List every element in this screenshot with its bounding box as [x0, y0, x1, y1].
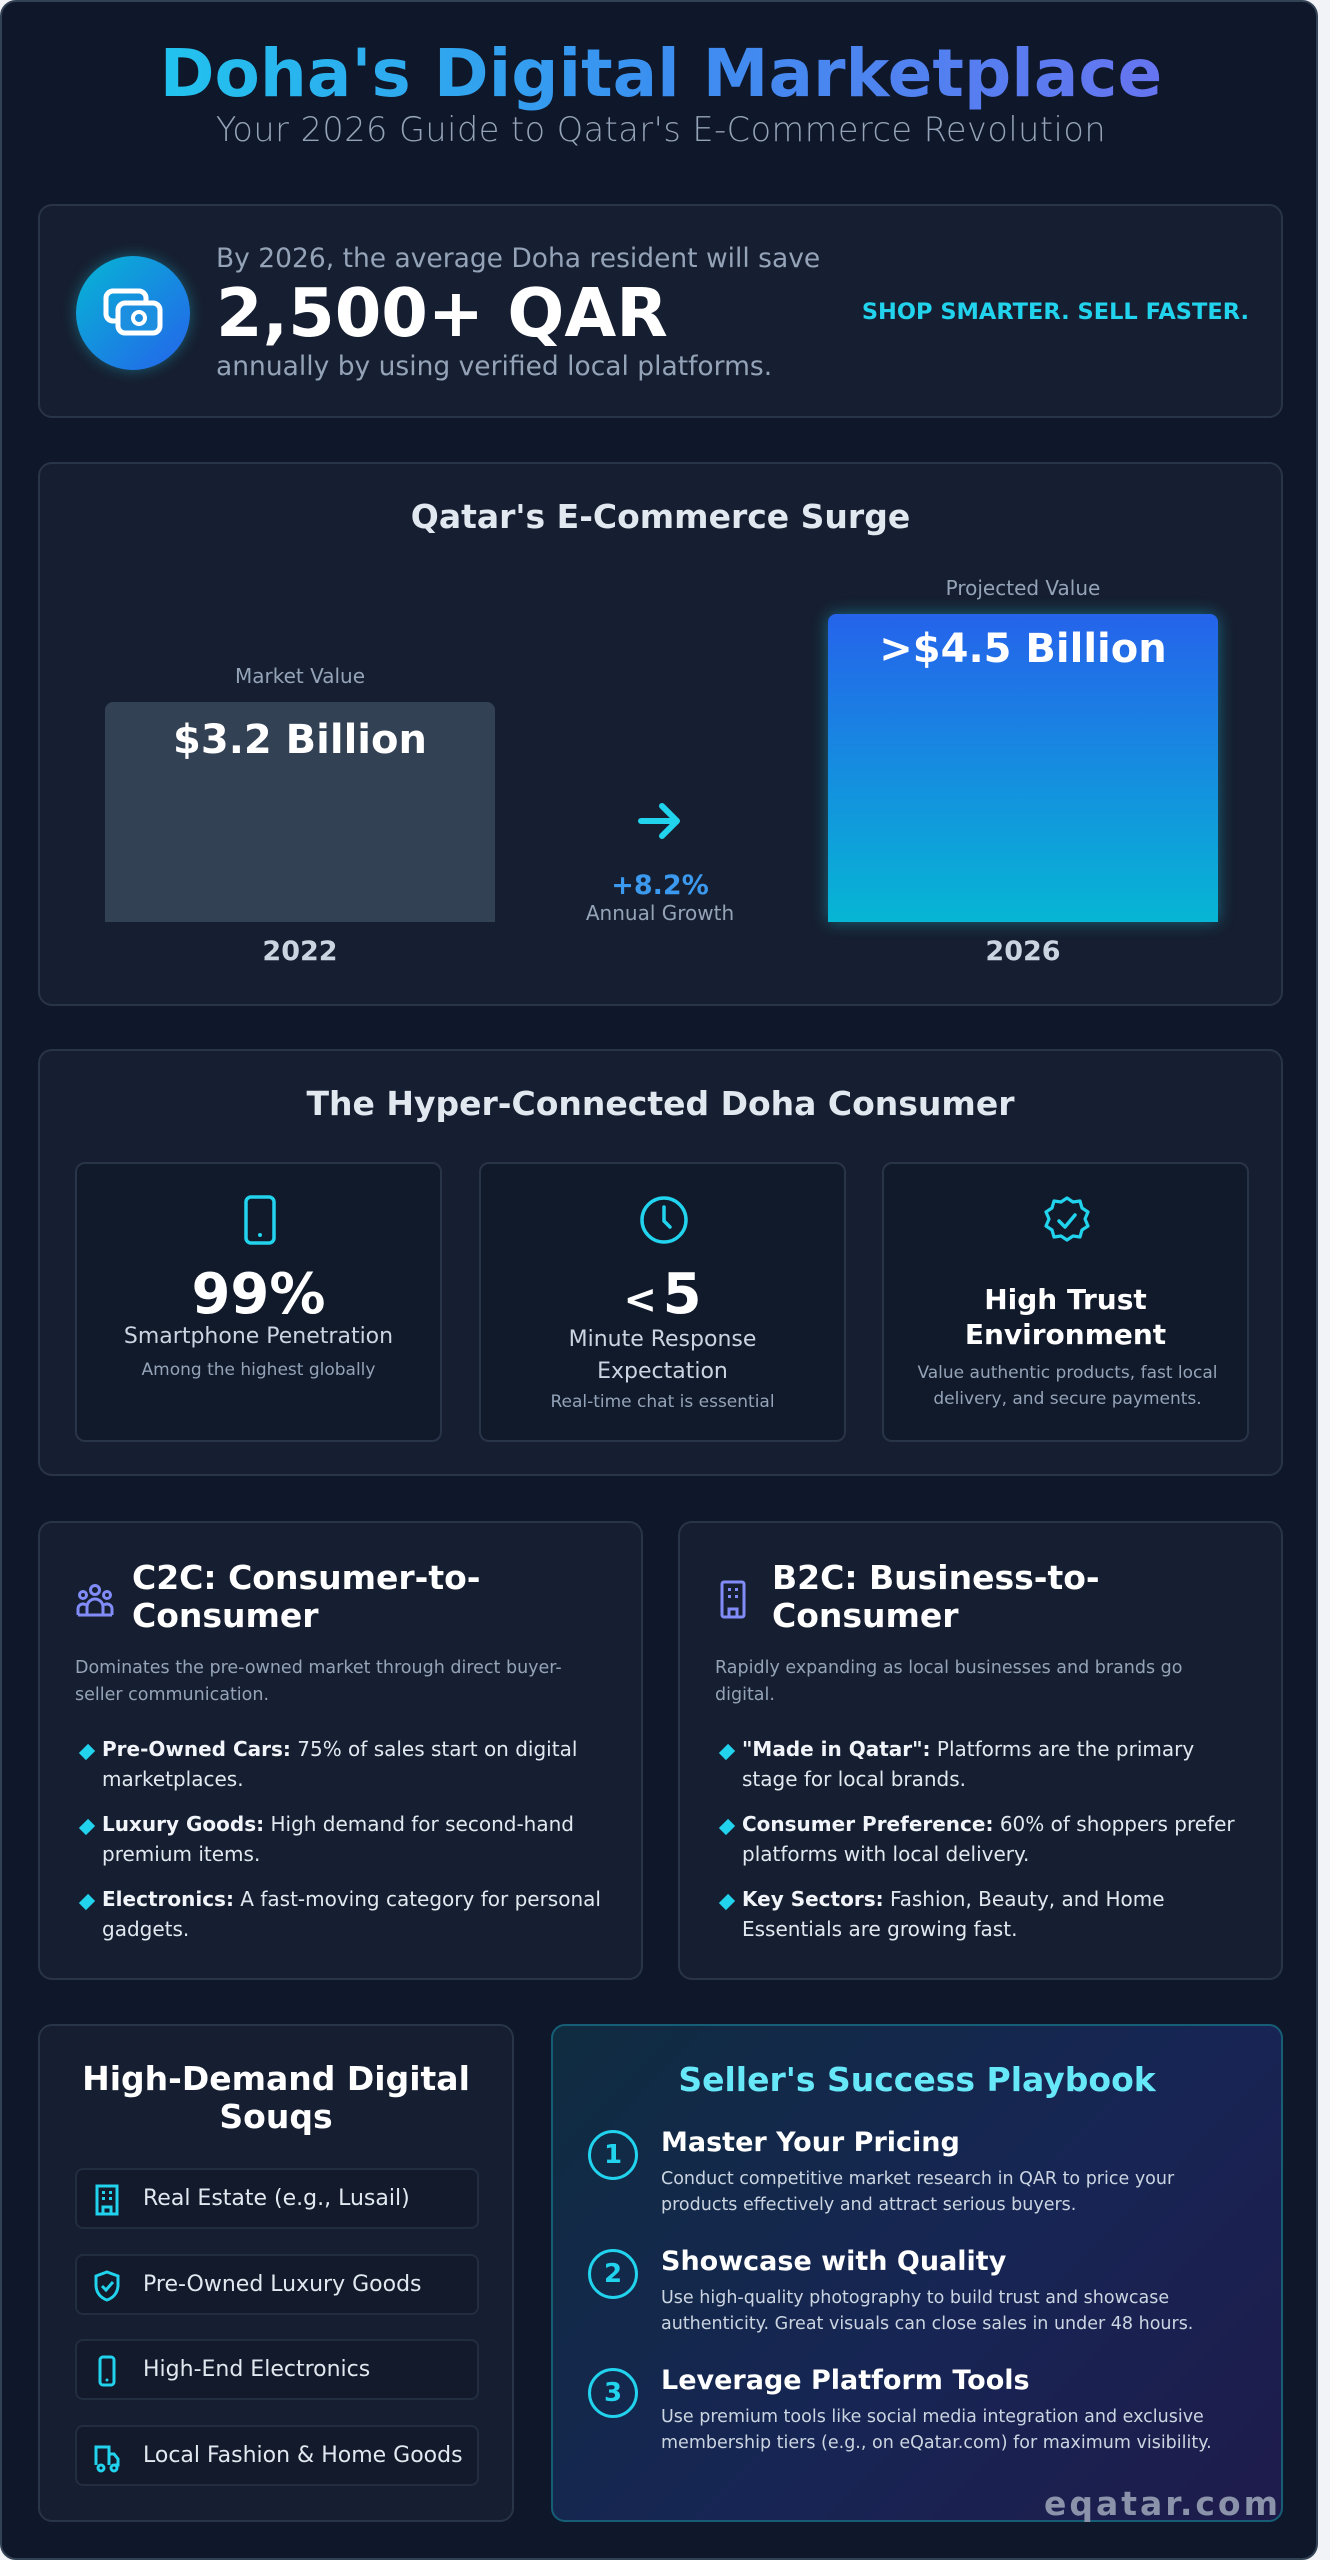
- item: fashion: [75, 2425, 479, 2486]
- step 3: [588, 2365, 1212, 2453]
- card: trust: Value authentic products, fast local delivery, and secure payments.: [917, 1363, 1218, 1409]
- panel: C2C: [38, 1521, 643, 1980]
- card: response time: Real-time chat is essential: [550, 1392, 775, 1412]
- heading: Souqs: [219, 2097, 333, 2136]
- bar 2026: [819, 576, 1227, 967]
- item: electronics: [75, 2339, 479, 2400]
- heading: Qatar's E-Commerce Surge: [411, 497, 910, 536]
- item: real estate: [75, 2168, 479, 2229]
- panel: e-commerce surge chart: 2022: [262, 936, 338, 967]
- bullets: Pre-Owned Cars: 75% of sales start on digital marketplaces.: [102, 1737, 577, 1791]
- heading: B2C: Business-to-: [772, 1558, 1100, 1597]
- subtitle: Your 2026 Guide to Qatar's E-Commerce Revolution: [216, 110, 1106, 149]
- description: Rapidly expanding as local businesses and brands go digital.: [715, 1658, 1183, 1705]
- item: fashion: Local Fashion & Home Goods: [143, 2443, 463, 2468]
- panel: hyper-connected consumer: [38, 1049, 1283, 1476]
- watermark: eqatar.com: [1044, 2484, 1281, 2523]
- bar 2022: [105, 664, 495, 967]
- heading: Consumer: [772, 1596, 959, 1635]
- heading: The Hyper-Connected Doha Consumer: [307, 1084, 1014, 1123]
- panel: C2C: Electronics: A fast-moving category for personal gadgets.: [102, 1887, 601, 1941]
- panel: B2C: Consumer Preference: 60% of shoppers prefer platforms with local delivery.: [742, 1812, 1235, 1866]
- item: electronics: High-End Electronics: [143, 2357, 370, 2382]
- panel: digital souqs: [38, 2024, 514, 2522]
- card: response time: < 5: [623, 1262, 702, 1327]
- title: Doha's Digital Marketplace: [160, 35, 1162, 112]
- icon: users: [76, 1584, 114, 1616]
- step 3: Leverage Platform Tools: [661, 2365, 1030, 2396]
- bar 2026: >$4.5 Billion: [879, 626, 1167, 672]
- icon: money: [76, 256, 190, 370]
- item: luxury goods: Pre-Owned Luxury Goods: [143, 2272, 422, 2297]
- step 1: [588, 2127, 1174, 2215]
- card: response time: [479, 1162, 846, 1442]
- card: response time: Expectation: [597, 1359, 728, 1384]
- panel: seller playbook: [551, 2024, 1283, 2522]
- bar 2022: Market Value: [235, 664, 365, 688]
- bullets: "Made in Qatar": Platforms are the primary stage for local brands.: [742, 1737, 1194, 1791]
- icon: building: [720, 1580, 746, 1618]
- panel: B2C: [678, 1521, 1283, 1980]
- item: luxury goods: [75, 2254, 479, 2315]
- card: trust: Environment: [965, 1318, 1166, 1351]
- icon: phone: [244, 1195, 276, 1245]
- step 3: Use premium tools like social media integration and exclusive membership tiers (e.g., on eQatar.com) for maximum visibility.: [661, 2407, 1212, 2453]
- growth arrow: [586, 803, 734, 925]
- item: real estate: Real Estate (e.g., Lusail): [143, 2186, 410, 2211]
- bar 2026: 2026: [985, 936, 1061, 967]
- card: response time: Minute Response: [569, 1327, 756, 1352]
- card: smartphone: Smartphone Penetration: [124, 1324, 393, 1349]
- step 3: 3: [604, 2378, 622, 2408]
- heading: Seller's Success Playbook: [678, 2060, 1156, 2099]
- savings text: [216, 243, 820, 382]
- savings text: 2,500+ QAR: [216, 274, 668, 352]
- icon: verified badge: [1044, 1196, 1090, 1242]
- step 1: Conduct competitive market research in QAR to price your products effectively and attract serious buyers.: [661, 2169, 1174, 2215]
- bar 2022: $3.2 Billion: [173, 717, 427, 763]
- heading: [82, 2059, 470, 2136]
- card: smartphone: 99%: [191, 1262, 326, 1327]
- panel: e-commerce surge chart: [38, 462, 1283, 1006]
- tagline: SHOP SMARTER. SELL FASTER.: [862, 299, 1249, 325]
- growth arrow: +8.2%: [611, 870, 709, 901]
- step 2: [588, 2246, 1193, 2334]
- heading: Consumer: [132, 1596, 319, 1635]
- icon: clock: [640, 1196, 688, 1244]
- heading: [132, 1558, 480, 1635]
- heading: C2C: Consumer-to-: [132, 1558, 480, 1597]
- panel: B2C: Key Sectors: Fashion, Beauty, and Home Essentials are growing fast.: [742, 1887, 1165, 1941]
- panel: savings callout: [38, 204, 1283, 418]
- savings text: By 2026, the average Doha resident will save: [216, 243, 820, 274]
- bar 2026: Projected Value: [946, 576, 1100, 600]
- step 2: 2: [604, 2259, 622, 2289]
- heading: [772, 1558, 1100, 1635]
- savings text: annually by using verified local platforms.: [216, 351, 772, 382]
- step 1: Master Your Pricing: [661, 2127, 960, 2158]
- growth arrow: Annual Growth: [586, 901, 734, 925]
- card: trust: High Trust: [984, 1283, 1147, 1316]
- card: smartphone: [75, 1162, 442, 1442]
- card: smartphone: Among the highest globally: [142, 1360, 375, 1380]
- panel: C2C: Luxury Goods: High demand for second-hand premium items.: [102, 1812, 574, 1866]
- card: trust: [882, 1162, 1249, 1442]
- step 2: Use high-quality photography to build trust and showcase authenticity. Great visuals can close sales in under 48 hours.: [661, 2288, 1193, 2334]
- description: Dominates the pre-owned market through direct buyer-seller communication.: [75, 1658, 562, 1705]
- step 1: 1: [604, 2140, 622, 2170]
- step 2: Showcase with Quality: [661, 2246, 1006, 2277]
- heading: High-Demand Digital: [82, 2059, 470, 2098]
